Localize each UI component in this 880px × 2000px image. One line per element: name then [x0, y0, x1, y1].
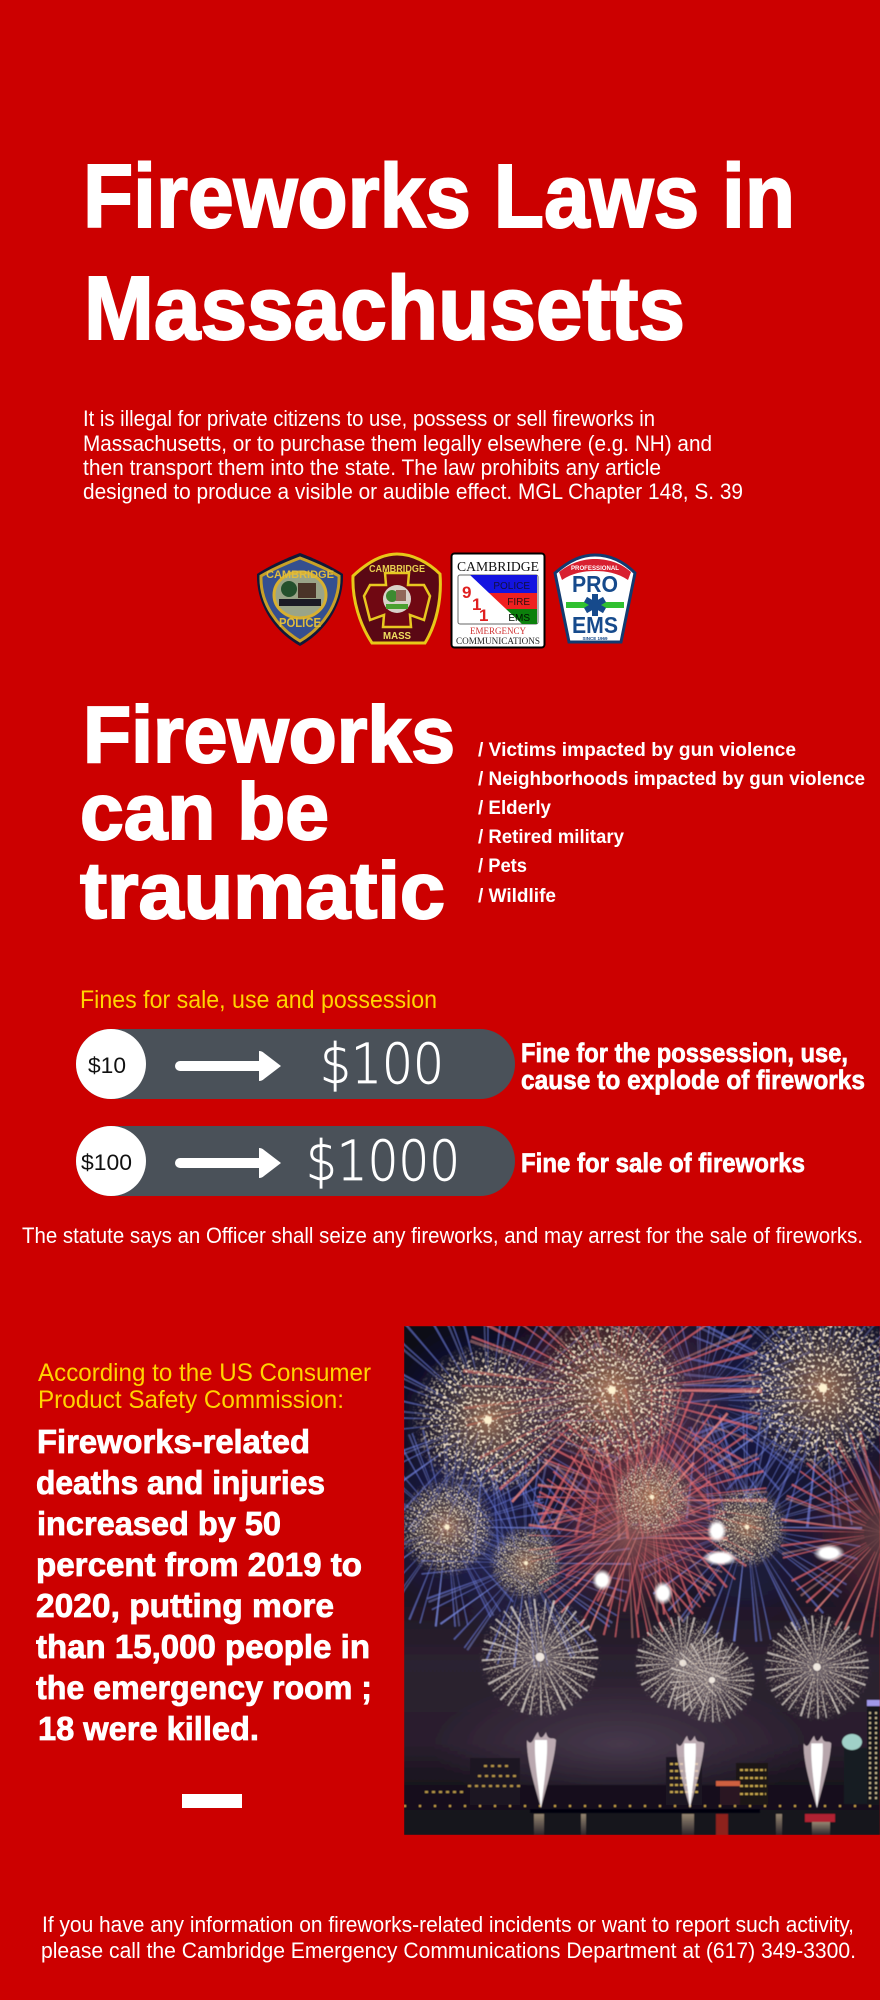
badge: Pro EMS: EMS: [572, 612, 618, 638]
heading: Fireworks can be traumatic: traumatic: [80, 846, 445, 935]
badge: Cambridge Police: CAMBRIDGE: [266, 569, 334, 581]
heading: Fireworks can be traumatic: can be: [80, 767, 329, 856]
badge: Cambridge 911: EMS: [508, 613, 530, 624]
badge: Pro EMS: SINCE 1969: [582, 636, 608, 641]
skyline: [404, 1700, 880, 1812]
badge: Cambridge 911: [452, 554, 544, 648]
source label: Product Safety Commission:: [38, 1386, 344, 1414]
statistic text: percent from 2019 to: [36, 1546, 362, 1583]
intro paragraph: It is illegal for private citizens to use, possess or sell fireworks in: [83, 406, 655, 431]
badge: Cambridge 911: COMMUNICATIONS: [456, 637, 540, 647]
list: affected groups: / Retired military: [478, 826, 624, 848]
badge: Pro EMS: PRO: [572, 571, 618, 597]
statistic text: [36, 1423, 372, 1747]
badge: Cambridge 911: FIRE: [507, 597, 530, 608]
fines heading: Fines for sale, use and possession: [80, 986, 437, 1014]
fine pill: $100 to $1000: [76, 1126, 515, 1196]
heading: Fireworks can be traumatic: Fireworks: [83, 690, 455, 779]
statistic text: 18 were killed.: [38, 1710, 259, 1747]
footer call to action: If you have any information on fireworks-related incidents or want to report such activity,: [42, 1912, 854, 1937]
statistic text: increased by 50: [37, 1505, 281, 1542]
badge: Cambridge 911: EMERGENCY: [470, 627, 526, 637]
badge: Cambridge 911: POLICE: [493, 581, 530, 592]
fountains: [527, 1732, 831, 1808]
dash: [182, 1794, 242, 1808]
fine label: sale: Fine for sale of fireworks: [521, 1148, 805, 1178]
list: affected groups: / Elderly: [478, 797, 551, 819]
blue rays: [404, 1326, 880, 1668]
statistic text: deaths and injuries: [36, 1464, 325, 1501]
gold cores: [397, 1303, 880, 1601]
statistic text: the emergency room ;: [36, 1669, 372, 1706]
fine pill: $100 to $1000: $1000: [306, 1129, 460, 1193]
intro paragraph: then transport them into the state. The law prohibits any article: [83, 455, 661, 480]
badge: Pro EMS: PROFESSIONAL: [571, 565, 619, 572]
list: affected groups: / Wildlife: [478, 885, 556, 907]
footer call to action: [41, 1912, 856, 1963]
list: affected groups: / Pets: [478, 855, 527, 877]
fine label: possession and use: [521, 1038, 865, 1095]
fine pill: $10 to $100: [76, 1029, 515, 1099]
badge: Cambridge Police: POLICE: [279, 615, 321, 630]
statistic text: than 15,000 people in: [36, 1628, 370, 1665]
fine pill: $100 to $1000: $100: [81, 1150, 132, 1175]
statistic text: Fireworks-related: [37, 1423, 310, 1460]
source label: According to the US Consumer: [38, 1359, 371, 1387]
intro paragraph: [83, 406, 743, 504]
badge: Cambridge 911: 9: [462, 583, 471, 602]
white flashes: [592, 1519, 845, 1605]
badge: Cambridge Police: [257, 553, 343, 646]
badge: Cambridge Fire: [353, 554, 440, 643]
badge: Cambridge 911: CAMBRIDGE: [457, 560, 539, 575]
list: affected groups: / Victims impacted by gun violence: [478, 739, 796, 761]
title: Fireworks Laws in: [83, 147, 795, 247]
heading: Fireworks can be traumatic: [80, 690, 455, 935]
red rays: [484, 1262, 880, 1623]
fireworks photo: [404, 1326, 880, 1835]
title: [83, 147, 795, 359]
intro paragraph: designed to produce a visible or audible effect. MGL Chapter 148, S. 39: [83, 479, 743, 504]
badge: Cambridge Fire: CAMBRIDGE: [369, 563, 425, 575]
fine pill: $10 to $100: $10: [88, 1053, 126, 1078]
badge: Cambridge 911: 1: [479, 606, 488, 625]
agency badges: [257, 553, 635, 648]
white bursts: [478, 1595, 872, 1725]
source label: [38, 1359, 371, 1414]
title: Massachusetts: [84, 259, 685, 359]
footer call to action: please call the Cambridge Emergency Communications Department at (617) 349-3300.: [41, 1938, 856, 1963]
water: [404, 1809, 880, 1835]
haze: [470, 1690, 768, 1786]
arrow: [175, 1148, 281, 1178]
arrow: [175, 1051, 281, 1081]
statistic text: 2020, putting more: [36, 1587, 334, 1624]
badge: Cambridge 911: 1: [472, 595, 481, 614]
badge: Cambridge Fire: MASS: [383, 631, 411, 642]
badge: Pro EMS: [555, 555, 635, 642]
intro paragraph: Massachusetts, or to purchase them legally elsewhere (e.g. NH) and: [83, 431, 712, 456]
fine pill: $10 to $100: $100: [320, 1032, 444, 1096]
list: affected groups: [478, 739, 865, 907]
list: affected groups: / Neighborhoods impacted by gun violence: [478, 768, 865, 790]
